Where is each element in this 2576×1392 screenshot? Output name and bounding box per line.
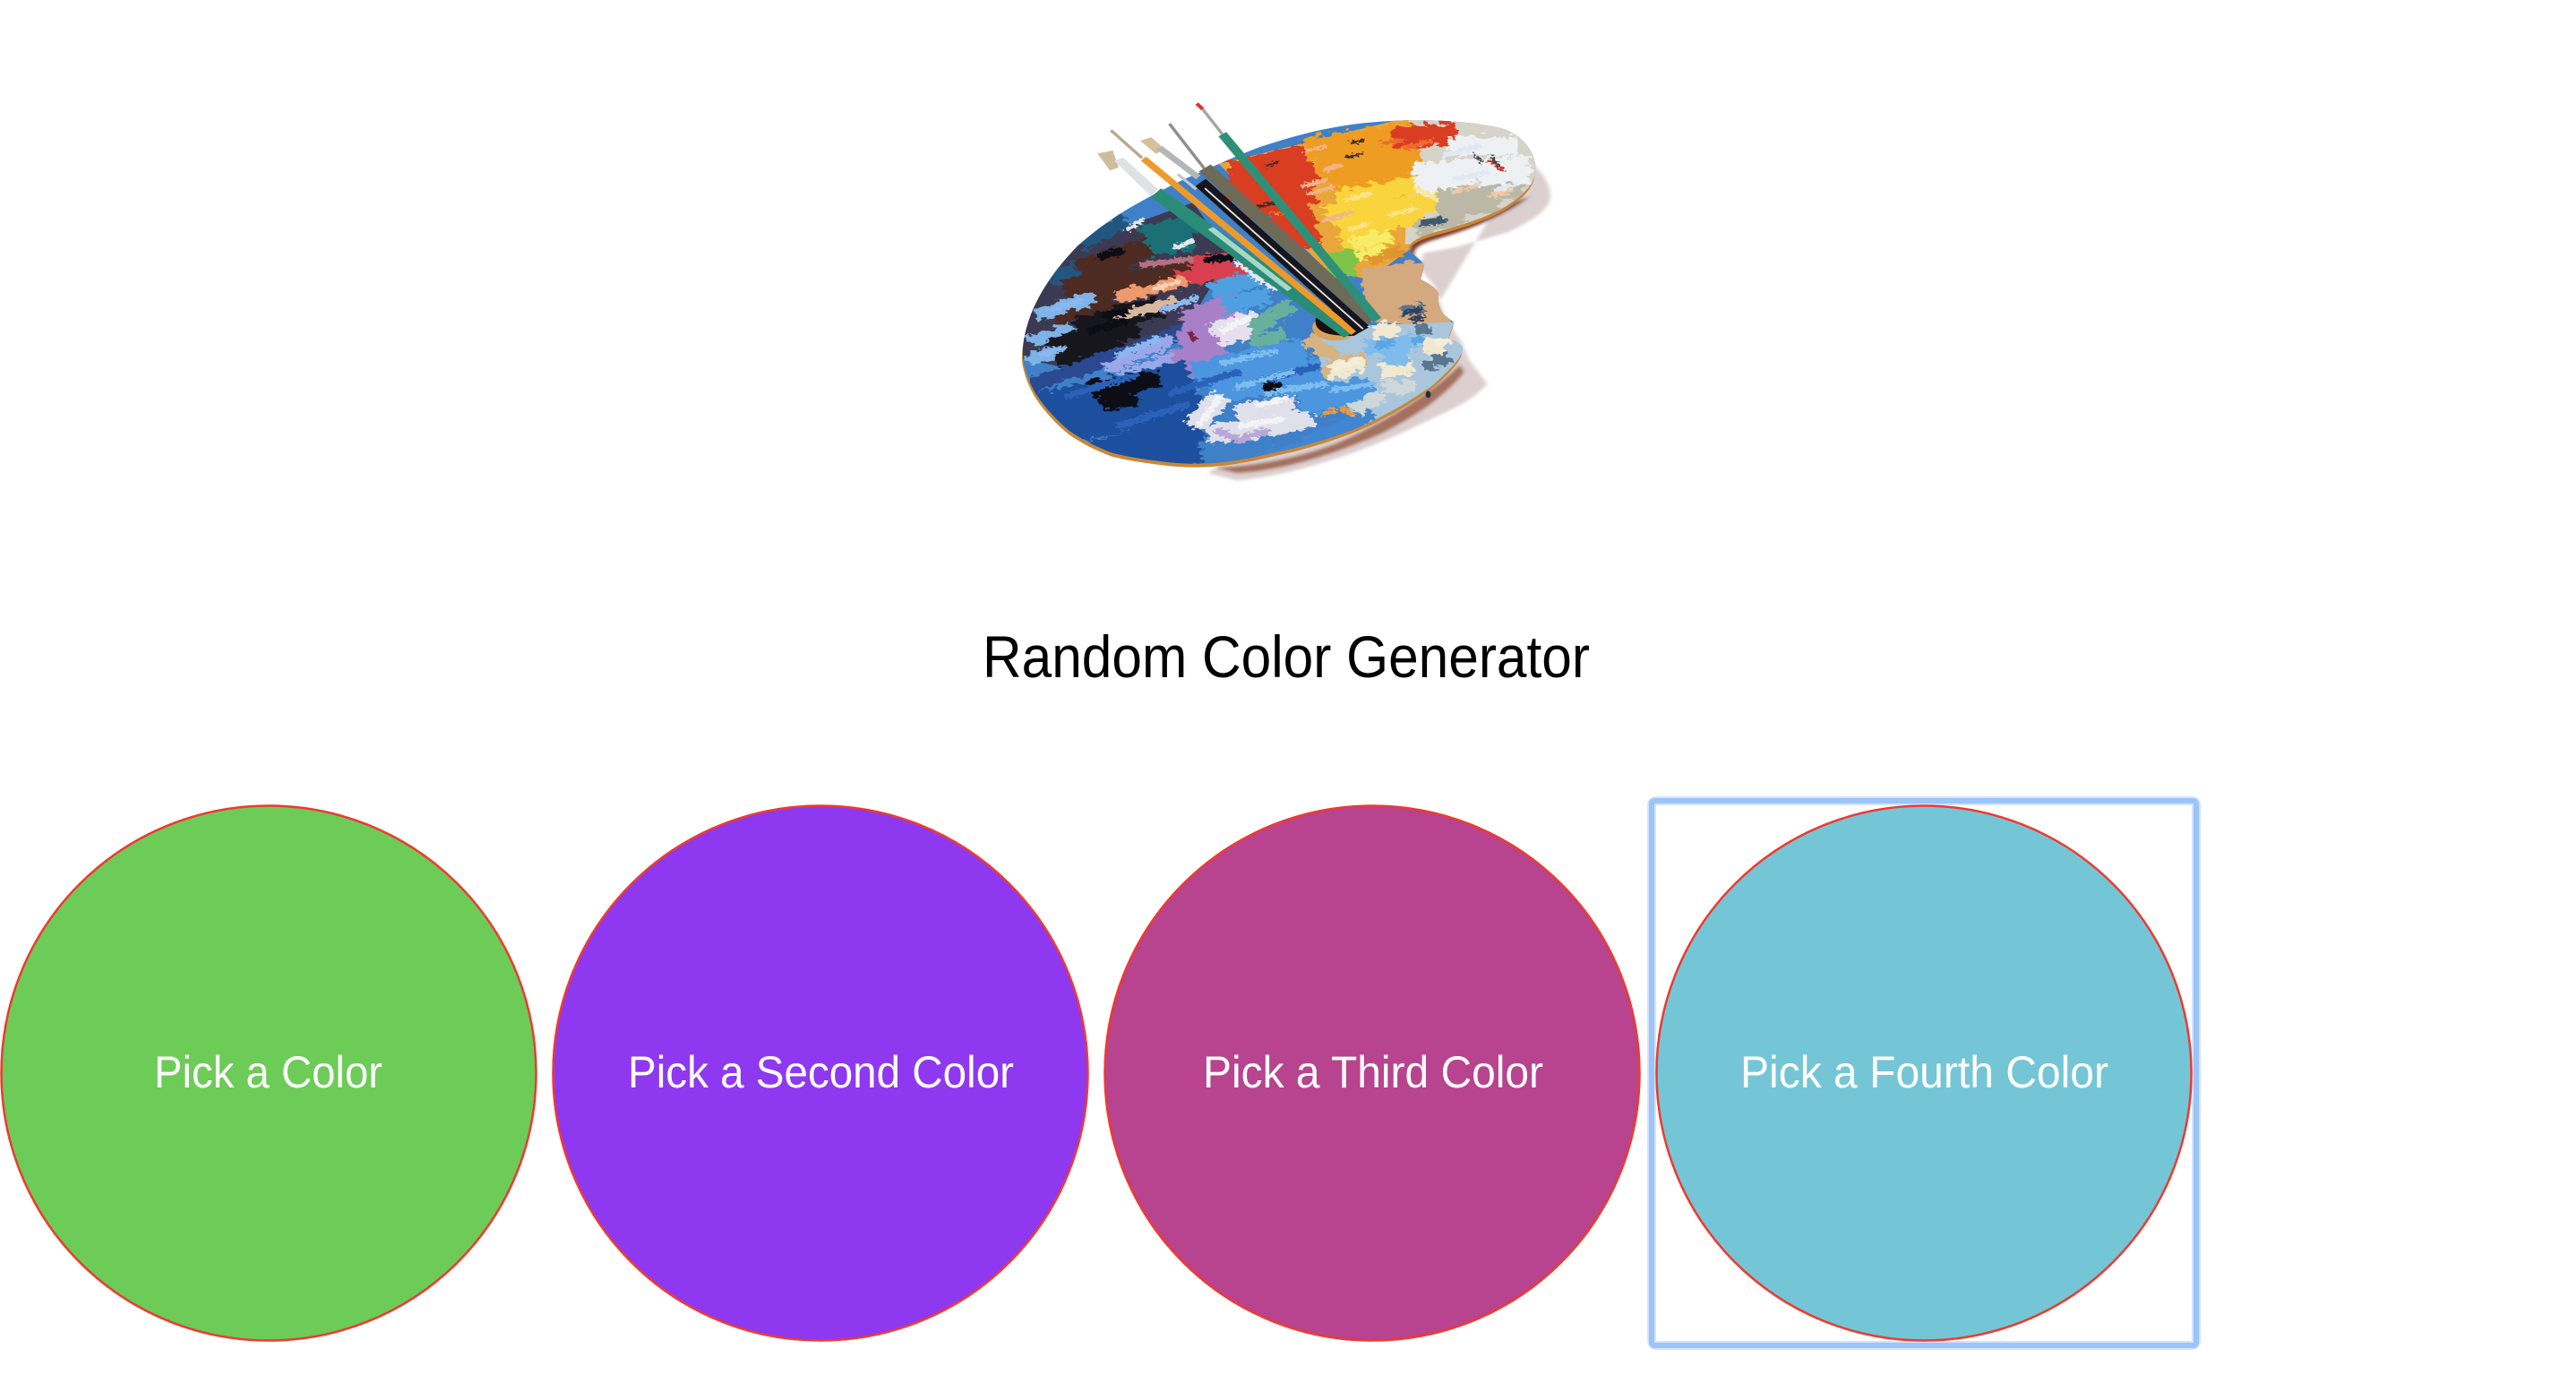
button: pick a second color: Pick a Second Color — [628, 1047, 1014, 1097]
page canvas — [0, 102, 2201, 1350]
button: pick a fourth color: Pick a Fourth Color — [1740, 1047, 2108, 1097]
brush: flat bristle with green handle — [1097, 150, 1358, 338]
brush: thin silver ferrule — [1178, 175, 1196, 189]
paint daubs on palette — [1023, 120, 1536, 464]
underpainting colour zones — [1018, 116, 1544, 428]
palette wood base — [1022, 124, 1535, 468]
brush: red tip with green handle — [1197, 104, 1378, 320]
broad paint regions — [1029, 134, 1530, 470]
palette foot peg — [1426, 391, 1430, 398]
button: pick a third color: Pick a Third Color — [1203, 1047, 1543, 1097]
button: pick a third color — [1105, 806, 1639, 1340]
focus outline around fourth circle — [1652, 801, 2196, 1345]
brush: thin with orange handle — [1111, 130, 1354, 333]
fine impasto strokes — [1043, 140, 1515, 441]
button: pick a color: Pick a Color — [154, 1047, 382, 1097]
paint brushes — [1097, 104, 1378, 338]
button: pick a fourth color — [1657, 806, 2191, 1340]
button: pick a color — [2, 806, 536, 1340]
thumb hole — [1312, 310, 1369, 340]
button: pick a second color — [554, 806, 1087, 1340]
palette cast shadow — [1207, 158, 1550, 480]
icon: artist palette with brushes — [1003, 104, 1551, 482]
brush: grey-brown handle — [1170, 124, 1378, 324]
title: Random Color Generator — [983, 623, 1590, 690]
brush: tan bristle with black handle — [1140, 137, 1369, 333]
